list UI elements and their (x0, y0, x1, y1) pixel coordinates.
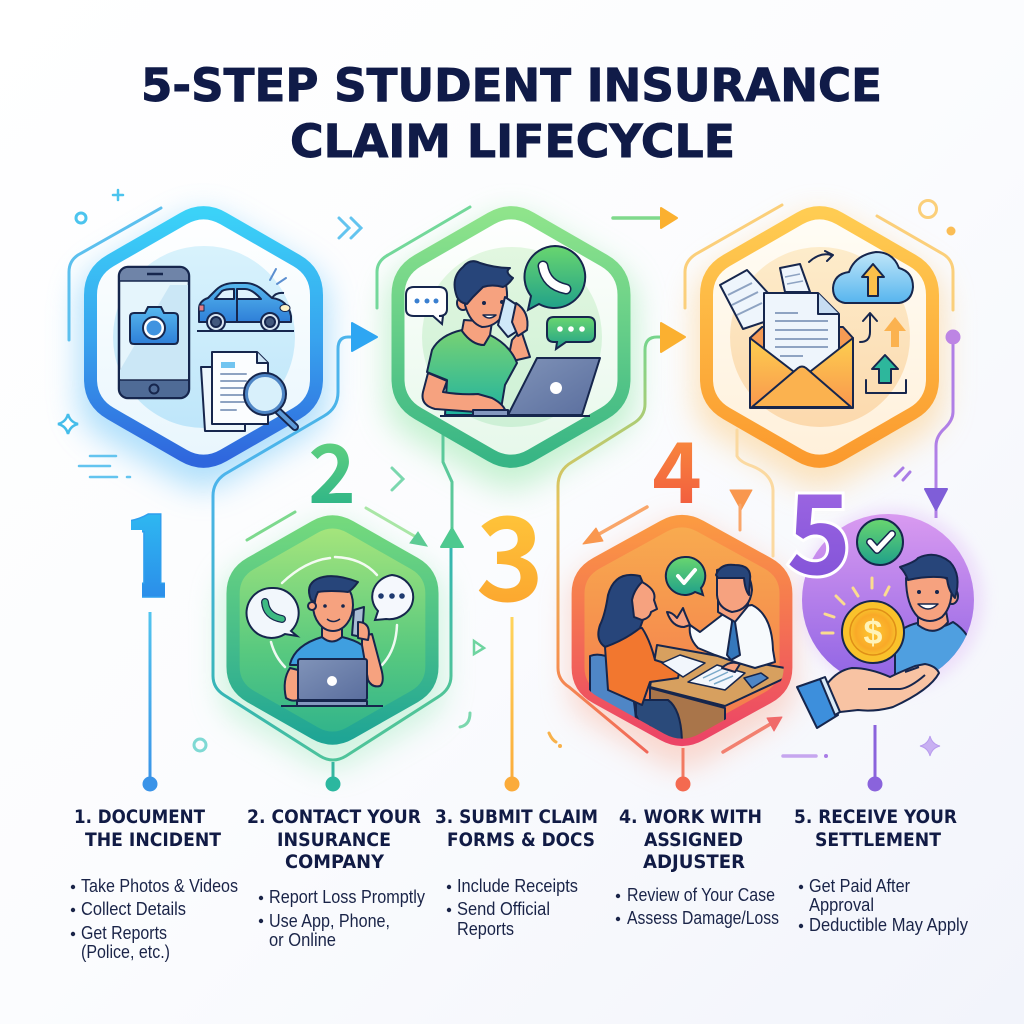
text block: step 4: Assess Damage/Loss (627, 907, 779, 928)
arrows around step 4 (583, 490, 782, 752)
text block: step 2: Use App, Phone, (269, 910, 390, 931)
text block: step 5: Approval (809, 894, 874, 915)
arrow: up to step 2 panel (441, 528, 463, 547)
text block: step 3: FORMS & DOCS (447, 829, 595, 851)
big number 5: 5 (787, 446, 851, 606)
panel: step 2 lower contact (233, 522, 432, 738)
icon: call bubble (247, 588, 299, 638)
text block: step 5: SETTLEMENT (815, 829, 941, 851)
text block: step 4 (616, 806, 779, 928)
text block: step 4: Review of Your Case (627, 884, 775, 905)
big number 4: 4 (652, 407, 702, 528)
icon: check speech badge (666, 557, 705, 595)
arrow: into step 3 (661, 323, 685, 352)
big number 3: 3 (476, 467, 544, 635)
panel: step 2 call the insurer (398, 213, 624, 461)
title: CLAIM LIFECYCLE (290, 115, 735, 168)
icon: open hand (797, 664, 939, 728)
icon: cloud upload (833, 252, 913, 303)
text block: step 1: THE INCIDENT (85, 829, 221, 851)
arrow: into step 2 (352, 323, 377, 351)
text block: step 3: 3. SUBMIT CLAIM (435, 806, 598, 828)
text block: step 5: Deductible May Apply (809, 914, 969, 935)
text block: step 1: Collect Details (81, 898, 186, 919)
connector: purple with arrow down to step 5 (925, 330, 960, 518)
illustration: desk (650, 645, 785, 745)
text block: step 2: or Online (269, 929, 336, 950)
text block: step 2: 2. CONTACT YOUR (247, 806, 421, 828)
text block: step 2: Report Loss Promptly (269, 886, 426, 907)
text block: step 1: Take Photos & Videos (81, 875, 238, 896)
icon: upload arrows (809, 251, 906, 393)
big number 1: 1 (116, 465, 184, 631)
text block: step 3: Reports (457, 918, 514, 939)
icon: damaged car (197, 269, 294, 331)
text block: step 3: Send Official (457, 898, 550, 919)
icon: coin with rays: $ (864, 614, 883, 652)
text block: step 1: Get Reports (81, 922, 167, 943)
illustration: woman seated (590, 575, 682, 745)
text block: step 2: INSURANCE (277, 829, 391, 851)
decorative icons (58, 190, 956, 758)
text block: step 4: ASSIGNED (644, 829, 743, 851)
panel: step 1 document the incident (90, 213, 316, 461)
illustration: papers on desk (662, 655, 768, 690)
illustration: adjuster (667, 565, 775, 672)
connector: step 3 bottom to right of step 4 (737, 430, 773, 556)
illustration: man on phone at laptop (422, 261, 600, 416)
icon: envelope with papers (720, 264, 853, 408)
timeline stem: step 4 (676, 748, 690, 792)
timeline stem: step 1 (142, 612, 158, 792)
text block: step 2 (247, 806, 426, 950)
icon: green chat bubble (547, 317, 595, 349)
title (141, 59, 882, 168)
illustration: smiling man (894, 554, 967, 674)
panel: step 5 receive settlement (797, 514, 980, 728)
panel: step 3 upload documents (706, 213, 932, 461)
text block: step 3 (435, 806, 598, 939)
text block: step 1 (71, 806, 238, 962)
icon: phone with camera (119, 267, 189, 398)
outer accent arcs (69, 205, 953, 340)
icon: coin with rays (822, 578, 904, 663)
text block: step 5 (794, 806, 969, 935)
big number 2: 2 (308, 410, 356, 527)
panel: step 4 meet adjuster (578, 521, 786, 745)
text block: step 1: (Police, etc.) (81, 941, 170, 962)
icon: phone call bubble (524, 246, 585, 310)
icon: documents with magnifier (201, 352, 295, 431)
connector: step 3 to step 4 (558, 337, 662, 752)
icon: left chat bubble (406, 287, 447, 324)
text block: step 4: 4. WORK WITH (619, 806, 762, 828)
title: 5-STEP STUDENT INSURANCE (141, 59, 882, 112)
text block: step 2: COMPANY (285, 851, 384, 873)
text block: step 3: Include Receipts (457, 875, 578, 896)
illustration: man with laptop and phone (281, 576, 383, 706)
white orbit arcs (271, 557, 397, 667)
icon: chat bubble (372, 575, 413, 620)
text block: step 5: 5. RECEIVE YOUR (794, 806, 957, 828)
icon: check badge (857, 519, 903, 565)
text block: step 4: ADJUSTER (643, 851, 745, 873)
timeline stem: step 3 (504, 617, 520, 792)
text block: step 5: Get Paid After (809, 875, 910, 896)
connector: step 1 to step 2 to step 3 (213, 337, 451, 760)
timeline stem: step 5 (868, 725, 882, 792)
text block: step 1: 1. DOCUMENT (74, 806, 205, 828)
timeline stem: step 2 (326, 762, 340, 792)
connector: green rise to step 2 panel (443, 432, 452, 530)
arrow: top green to yellow (613, 208, 677, 228)
